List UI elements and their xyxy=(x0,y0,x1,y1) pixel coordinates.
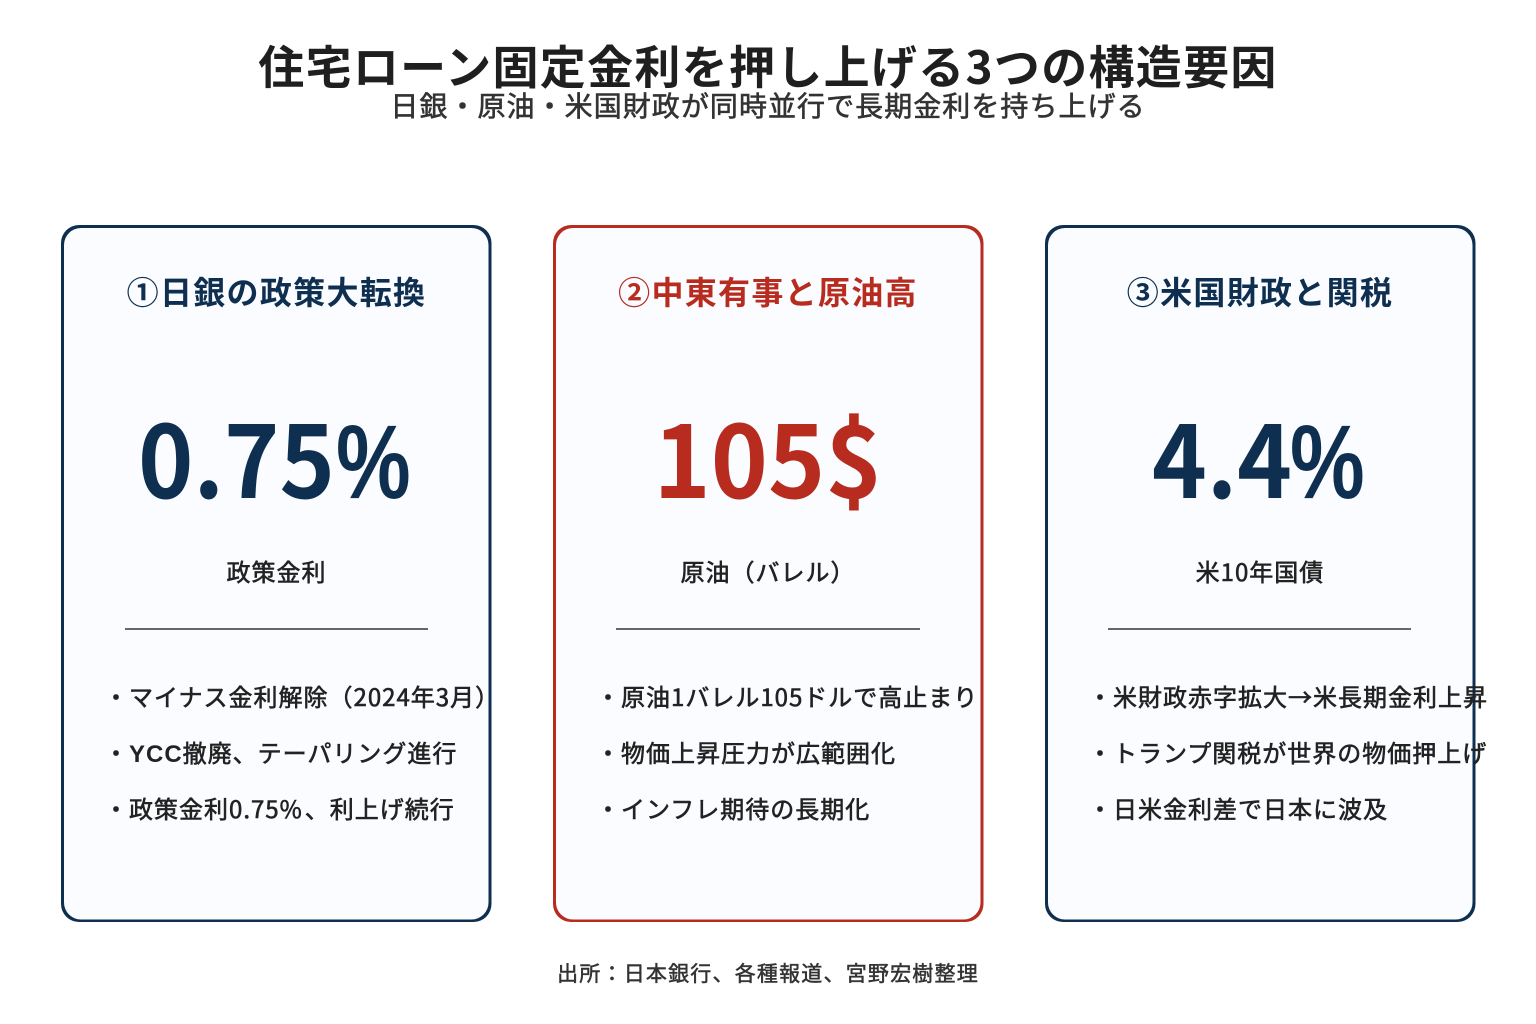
bullet list: ・政策金利0.75%、利上げ続行 xyxy=(104,790,455,825)
bullet list: ・インフレ期待の長期化 xyxy=(596,790,870,825)
bullet list: ・原油1バレル105ドルで高止まり xyxy=(596,678,978,713)
panel heading: ③米国財政と関税 xyxy=(1127,268,1393,314)
subtitle: 日銀・原油・米国財政が同時並行で長期金利を持ち上げる xyxy=(390,85,1146,125)
bullet list: ・日米金利差で日本に波及 xyxy=(1088,790,1388,825)
card background xyxy=(556,228,980,920)
key figure: % xyxy=(1290,404,1365,521)
figure label: 政策金利 xyxy=(226,553,326,588)
bullet list xyxy=(104,678,500,825)
panel heading: ②中東有事と原油高 xyxy=(618,268,918,314)
bullet list: ・YCC撤廃、テーパリング進行 xyxy=(104,734,457,769)
card border xyxy=(61,225,492,922)
title: 住宅ローン固定金利を押し上げる3つの構造要因 xyxy=(258,32,1278,98)
key figure: % xyxy=(336,404,411,521)
key figure: 105$ xyxy=(654,383,882,527)
bullet list: ・マイナス金利解除（2024年3月） xyxy=(104,678,500,713)
source footnote: 出所：日本銀行、各種報道、宮野宏樹整理 xyxy=(557,958,979,988)
card background xyxy=(1048,228,1472,920)
card border xyxy=(1045,225,1476,922)
bullet list xyxy=(596,678,978,825)
key figure: 0.75 xyxy=(138,382,335,527)
bullet list: ・米財政赤字拡大→米長期金利上昇 xyxy=(1088,678,1488,713)
bullet list xyxy=(1088,678,1488,825)
figure label: 原油（バレル） xyxy=(680,553,856,588)
panel heading: ①日銀の政策大転換 xyxy=(127,268,426,314)
panel: US fiscal policy and tariffs xyxy=(1045,225,1488,922)
bullet list: ・物価上昇圧力が広範囲化 xyxy=(596,734,896,769)
panel: Middle East and oil xyxy=(553,225,984,922)
key figure: 4.4 xyxy=(1152,382,1292,527)
bullet list: ・トランプ関税が世界の物価押上げ xyxy=(1088,734,1487,769)
card border xyxy=(553,225,984,922)
panel: BOJ policy shift xyxy=(61,225,500,922)
card background xyxy=(64,228,488,920)
key figure xyxy=(1152,382,1365,527)
figure label: 米10年国債 xyxy=(1196,553,1324,588)
